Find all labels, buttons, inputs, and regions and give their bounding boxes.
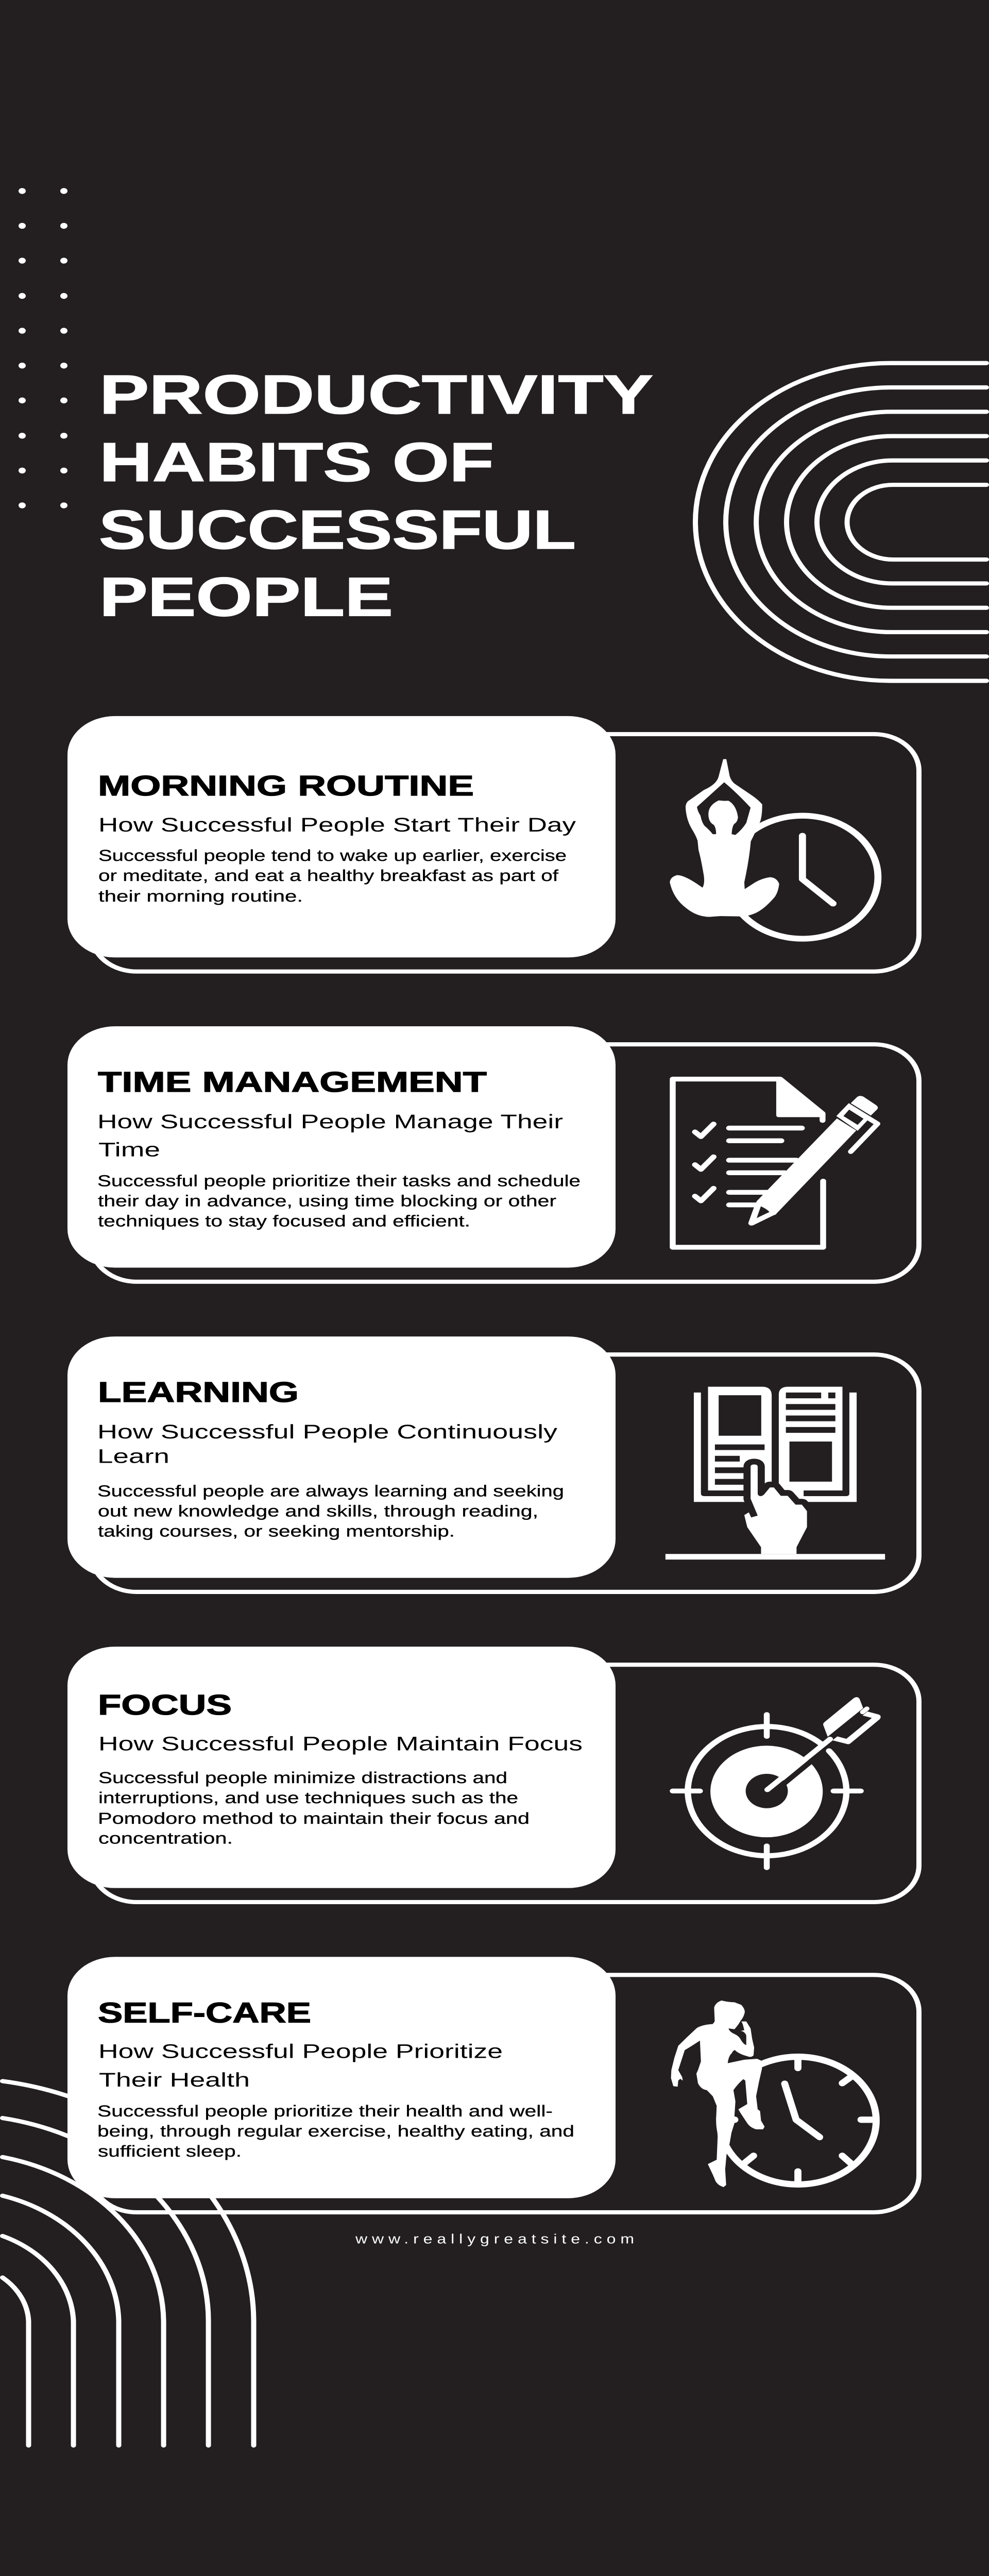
body text: self-care: Successful people prioritize their health and well- [97, 2103, 553, 2120]
body text: morning routine: Successful people tend to wake up earlier, exercise [98, 847, 567, 865]
panel: morning routine [67, 716, 919, 972]
body text: time management: Successful people prioritize their tasks and schedule [97, 1173, 581, 1190]
heading: self-care: SELF-CARE [98, 1997, 311, 2029]
heading: learning: LEARNING [98, 1377, 299, 1408]
title: HABITS OF [99, 431, 494, 493]
body text: time management [97, 1173, 581, 1230]
body text: learning: out new knowledge and skills, through reading, [98, 1503, 538, 1520]
subheading: morning routine: How Successful People Start Their Day [98, 814, 576, 836]
body text: focus: concentration. [98, 1829, 233, 1848]
subheading: time management: How Successful People Manage Their [97, 1110, 563, 1132]
icon: target and arrow [673, 1697, 881, 1868]
heading: morning routine: MORNING ROUTINE [98, 770, 474, 802]
body text: focus: Pomodoro method to maintain their focus and [98, 1810, 530, 1827]
panel: learning [67, 1336, 919, 1592]
body text: learning: taking courses, or seeking mentorship. [98, 1523, 455, 1540]
body text: morning routine: or meditate, and eat a healthy breakfast as part of [98, 867, 558, 885]
decorative concentric arcs, top right [695, 363, 986, 681]
body text: learning [97, 1483, 564, 1540]
body text: learning: Successful people are always learning and seeking [97, 1483, 564, 1500]
icon: checklist and pen [673, 1078, 878, 1247]
subheading: self-care: How Successful People Prioritize [98, 2040, 503, 2062]
panel: self-care [67, 1957, 919, 2212]
subheading: time management [97, 1110, 563, 1161]
subheading: focus: How Successful People Maintain Focus [98, 1732, 583, 1755]
subheading: learning [97, 1420, 558, 1467]
website footer: www.reallygreatsite.com [355, 2231, 634, 2246]
title [99, 364, 653, 628]
title: SUCCESSFUL [99, 499, 576, 561]
panel: focus [67, 1647, 919, 1902]
body text: morning routine [98, 847, 567, 905]
body text: focus: interruptions, and use techniques such as the [98, 1789, 518, 1807]
body text: time management: techniques to stay focused and efficient. [98, 1213, 470, 1230]
body text: self-care: sufficient sleep. [98, 2143, 242, 2160]
body text: focus [98, 1769, 530, 1848]
panel: time management [67, 1026, 919, 1282]
subheading: learning: Learn [97, 1445, 169, 1467]
body text: time management: their day in advance, using time blocking or other [98, 1193, 556, 1210]
heading: time management: TIME MANAGEMENT [98, 1066, 487, 1098]
icon: yoga figure and clock [670, 759, 878, 939]
title: PEOPLE [99, 566, 393, 628]
subheading: self-care: Their Health [99, 2069, 250, 2091]
heading: focus: FOCUS [98, 1689, 232, 1721]
icon: runner and clock [671, 2001, 876, 2187]
subheading: self-care [98, 2040, 503, 2091]
decorative dot grid [19, 188, 67, 509]
body text: morning routine: their morning routine. [98, 888, 303, 905]
title: PRODUCTIVITY [99, 364, 653, 425]
subheading: learning: How Successful People Continuously [97, 1420, 558, 1443]
body text: self-care: being, through regular exercise, healthy eating, and [97, 2123, 574, 2140]
subheading: time management: Time [98, 1139, 160, 1161]
body text: self-care [97, 2103, 574, 2160]
body text: focus: Successful people minimize distractions and [98, 1769, 507, 1787]
icon: book and pointing hand [666, 1387, 885, 1560]
decorative concentric arcs, bottom left [3, 2081, 253, 2446]
